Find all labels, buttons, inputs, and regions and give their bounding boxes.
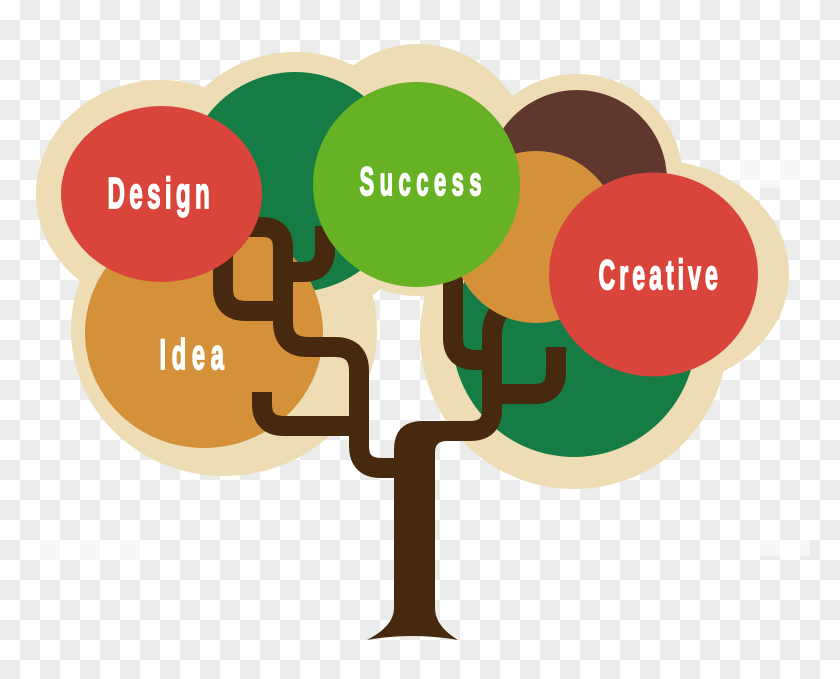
circle: design xyxy=(61,106,262,282)
label: Idea: Idea xyxy=(160,332,224,379)
circle: dark green top xyxy=(185,72,405,292)
circle: dark green bottom xyxy=(452,213,696,457)
circle: creative xyxy=(549,172,758,376)
circle: brown xyxy=(487,90,667,270)
cream canopy backdrop xyxy=(36,44,789,489)
label: Success: Success xyxy=(360,159,482,204)
label: Design: Design xyxy=(108,168,210,218)
tree branches and trunk xyxy=(223,226,556,640)
label: Creative: Creative xyxy=(598,252,718,299)
circle: orange idea xyxy=(85,218,323,448)
circle: success xyxy=(313,82,520,287)
trunk xyxy=(367,421,458,640)
circle: orange right xyxy=(452,151,620,323)
